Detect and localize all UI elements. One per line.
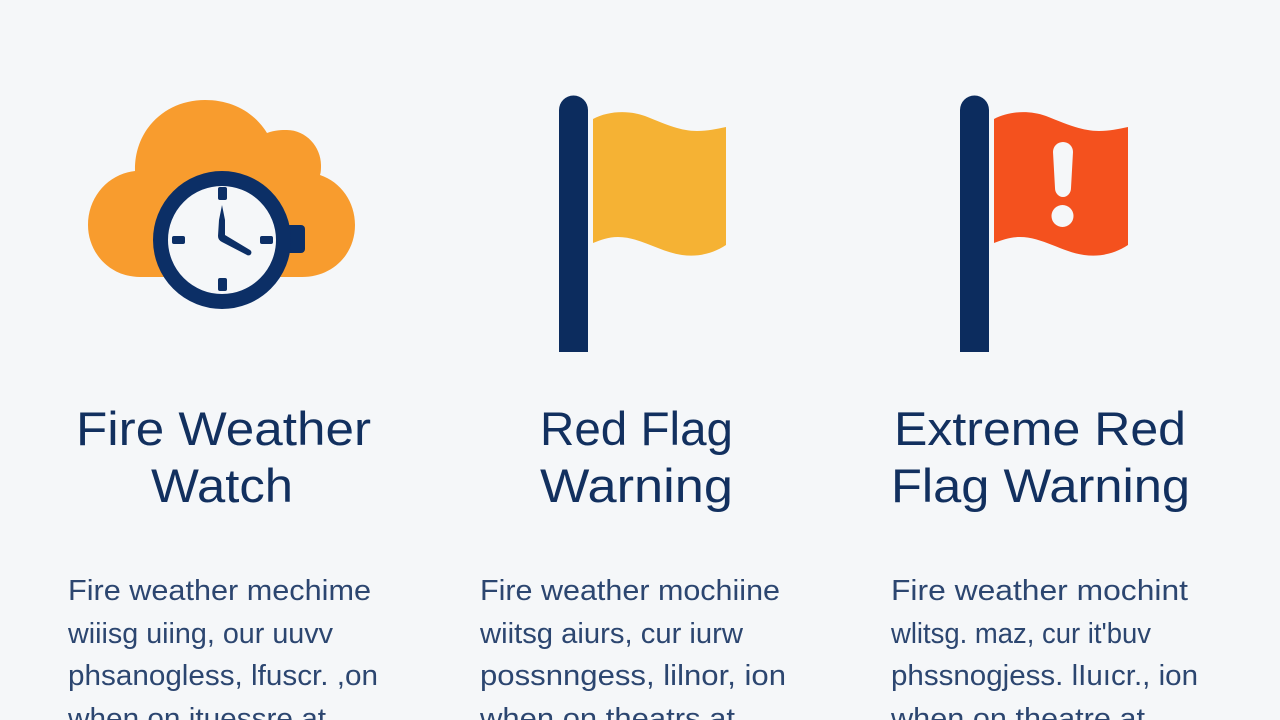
heading: Flag Warning	[891, 459, 1190, 512]
description text	[67, 575, 378, 720]
description text: wiitsg aiurs, cur iurw	[479, 618, 744, 650]
flag pole	[960, 96, 989, 352]
description text: phssnogjess. lIuıcr., ion	[891, 660, 1198, 692]
flag cloth	[994, 112, 1128, 256]
heading: Warning	[540, 459, 733, 512]
panel: Red Flag Warning	[479, 96, 786, 720]
description text: Fire weather mochiine	[480, 575, 780, 607]
panel: Fire Weather Watch	[67, 100, 378, 720]
description text	[479, 575, 786, 720]
description text	[890, 575, 1198, 720]
clock	[160, 178, 305, 302]
panel: Extreme Red Flag Warning	[890, 96, 1198, 720]
description text: wlitsg. maz, cur it'buv	[890, 618, 1151, 650]
icon: red flag with exclamation mark	[960, 96, 1128, 352]
flag cloth	[593, 112, 726, 256]
description text: possnngess, lilnor, ion	[480, 660, 786, 692]
heading: Extreme Red	[894, 402, 1186, 455]
exclamation mark	[1052, 142, 1074, 227]
cloud	[88, 100, 355, 277]
heading	[76, 402, 371, 512]
heading	[540, 402, 733, 512]
flag pole	[559, 96, 588, 352]
icon: cloud with clock	[88, 100, 355, 302]
heading	[891, 402, 1190, 512]
description text: Fire weather mochint	[891, 575, 1188, 607]
description text: phsanogless, lfuscr. ,on	[68, 660, 378, 692]
heading: Red Flag	[540, 402, 733, 455]
icon: yellow flag	[559, 96, 726, 352]
description text: wiiisg uiing, our uuvv	[67, 618, 333, 650]
heading: Fire Weather	[76, 402, 371, 455]
heading: Watch	[151, 459, 293, 512]
description text: Fire weather mechime	[68, 575, 371, 607]
